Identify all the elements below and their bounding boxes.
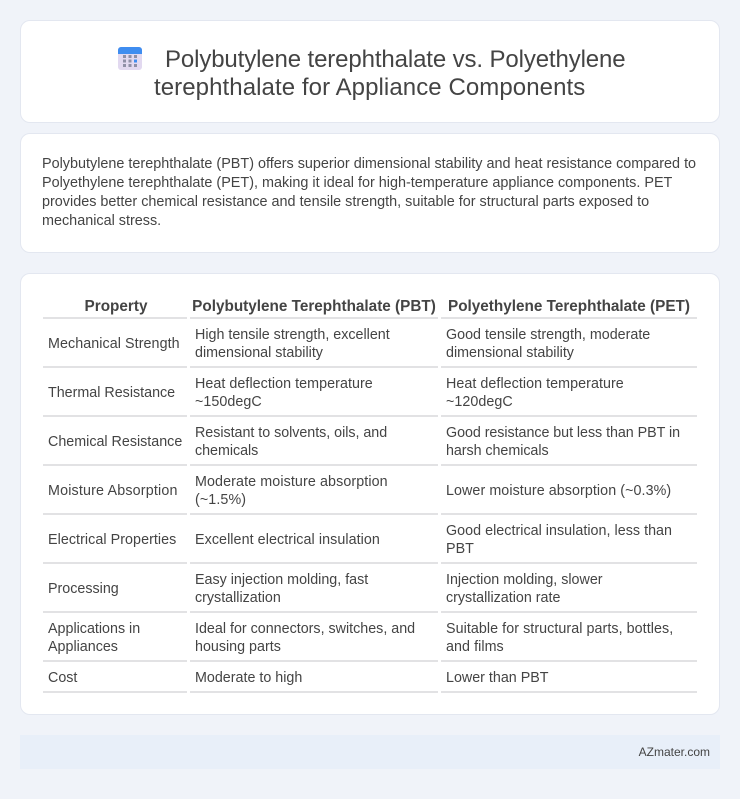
cell: Heat deflection temperature: [195, 376, 373, 392]
panel: comparison table card: [20, 273, 720, 715]
cell: [195, 425, 387, 459]
cell: Injection molding, slower: [446, 572, 603, 588]
title: [154, 46, 625, 101]
cell: Moderate to high: [195, 670, 302, 686]
cell: [195, 474, 388, 508]
row: Electrical Properties: Electrical Properties: [48, 532, 176, 548]
cell: Easy injection molding, fast: [195, 572, 368, 588]
cell: Lower moisture absorption (~0.3%): [446, 483, 671, 499]
cell: [446, 425, 680, 459]
cell: [446, 572, 603, 606]
summary text: mechanical stress.: [42, 213, 161, 229]
cell: [195, 572, 368, 606]
header: PET: Polyethylene Terephthalate (PET): [448, 298, 690, 315]
row: Applications in Appliances: [48, 621, 140, 655]
cell: dimensional stability: [195, 345, 323, 361]
cell: PBT: [446, 541, 474, 557]
cell: Resistant to solvents, oils, and: [195, 425, 387, 441]
cell: Suitable for structural parts, bottles,: [446, 621, 673, 637]
summary text: [42, 156, 696, 229]
cell: [195, 376, 373, 410]
summary text: Polybutylene terephthalate (PBT) offers superior dimensional stability and heat resistance compared to: [42, 156, 696, 172]
cell: chemicals: [195, 443, 258, 459]
header: Property: Property: [85, 298, 147, 315]
panel: summary card: [20, 133, 720, 253]
cell: [446, 327, 650, 361]
cell: Good resistance but less than PBT in: [446, 425, 680, 441]
cell: [446, 523, 672, 557]
cell: Ideal for connectors, switches, and: [195, 621, 415, 637]
panel: title card: [20, 20, 720, 123]
row: Mechanical Strength: Mechanical Strength: [48, 336, 180, 352]
row: Applications in Appliances: Appliances: [48, 639, 118, 655]
cell: [195, 327, 390, 361]
footer credit: AZmater.com: [639, 745, 710, 759]
cell: ~150degC: [195, 394, 262, 410]
cell: Heat deflection temperature: [446, 376, 624, 392]
title: terephthalate for Appliance Components: [154, 74, 585, 101]
row: Thermal Resistance: Thermal Resistance: [48, 385, 175, 401]
cell: (~1.5%): [195, 492, 246, 508]
row: Processing: Processing: [48, 581, 119, 597]
cell: Good tensile strength, moderate: [446, 327, 650, 343]
cell: [446, 376, 624, 410]
cell: [446, 621, 673, 655]
cell: ~120degC: [446, 394, 513, 410]
cell: dimensional stability: [446, 345, 574, 361]
cell: housing parts: [195, 639, 281, 655]
footer bar: [20, 735, 720, 769]
title: Polybutylene terephthalate vs. Polyethylene: [165, 46, 625, 73]
row: Applications in Appliances: Applications in: [48, 621, 140, 637]
row: Cost: Cost: [48, 670, 77, 686]
cell: and films: [446, 639, 504, 655]
cell: crystallization: [195, 590, 281, 606]
cell: [195, 621, 415, 655]
cell: Moderate moisture absorption: [195, 474, 388, 490]
icon: calendar: [118, 47, 142, 70]
row: Moisture Absorption: Moisture Absorption: [48, 483, 178, 499]
summary text: Polyethylene terephthalate (PET), making it ideal for high-temperature appliance components. PET: [42, 175, 672, 191]
cell: crystallization rate: [446, 590, 560, 606]
cell: Excellent electrical insulation: [195, 532, 380, 548]
cell: High tensile strength, excellent: [195, 327, 390, 343]
cell: harsh chemicals: [446, 443, 549, 459]
header: PBT: Polybutylene Terephthalate (PBT): [192, 298, 436, 315]
cell: Good electrical insulation, less than: [446, 523, 672, 539]
row: Chemical Resistance: Chemical Resistance: [48, 434, 182, 450]
summary text: provides better chemical resistance and tensile strength, suitable for structural parts exposed to: [42, 194, 649, 210]
cell: Lower than PBT: [446, 670, 549, 686]
